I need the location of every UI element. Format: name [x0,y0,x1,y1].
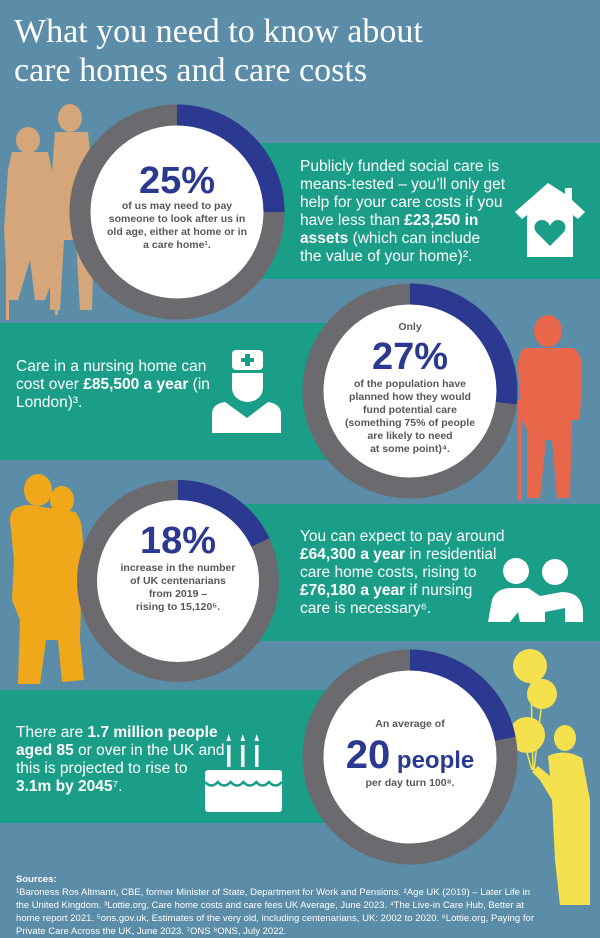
text: nursing home cost: London)³. [16,394,82,411]
sources: ¹Baroness Ros Altmann, CBE, former Minister of State, Department for Work and Pensions. ²Age UK (2019) – Later Life in [16,887,530,898]
ring 2 caption: fund potential care [363,404,457,416]
text: 1.7 million aged 85+: There are 1.7 million people [16,724,218,741]
text: residential costs: You can expect to pay around [300,528,505,545]
text: residential costs: £64,300 a year in residential [300,546,496,563]
illustration: beige couple with walker [4,104,95,320]
text: means-tested: means-tested – you’ll only get [300,176,506,193]
icon: house with heart [515,183,585,257]
stat: 27%: 27% [372,336,448,378]
sources: Private Care Across the UK, June 2023. ⁷ONS ⁸ONS, July 2022. [16,926,286,937]
ring 1 caption [107,200,247,251]
text: means-tested: Publicly funded social care is [300,158,499,175]
ring 2 caption: are likely to need [367,430,453,442]
ring 3 caption: rising to 15,120⁵. [136,601,220,613]
text: residential costs: £76,180 a year if nursing [300,582,472,599]
ring 2 caption: of the population have [354,378,466,390]
ring 3 caption: increase in the number [121,562,235,574]
text: nursing home cost [16,358,210,411]
text: 1.7 million aged 85+: this is projected to rise to [16,760,187,777]
text: residential costs [300,528,505,617]
ring 4 caption: per day turn 100⁸. [366,777,455,789]
text: 1.7 million aged 85+ [16,724,225,795]
sources: the United Kingdom. ³Lottie.org, Care home costs and care fees UK Average, June 2023. ⁴The Live-in Care Hub, Better at [16,900,524,911]
ring 3 caption: of UK centenarians [130,575,226,587]
icon: birthday cake [205,734,282,812]
text: means-tested [300,158,506,265]
band 1 [230,143,600,279]
icon: nurse [212,350,281,433]
ring 3 caption: from 2019 – [149,588,207,600]
text: 1.7 million aged 85+: 3.1m by 2045⁷. [16,778,122,795]
illustration: orange man with cane [518,315,582,500]
sources: Sources: [16,874,57,885]
stat: 18%: 18% [140,520,216,562]
sources [16,874,534,937]
ring 2 caption [345,378,475,455]
sources: home report 2021. ⁵ons.gov.uk, Estimates of the very old, including centenarians, UK: 2002 to 2020. ⁶Lottie.org, Paying for [16,913,534,924]
stat: 20 people: 20 people [346,733,474,777]
ring 3: 18% [87,490,269,672]
stat: 25%: 25% [139,160,215,202]
band 2 [0,323,410,460]
ring 1 caption: someone to look after us in [109,213,245,225]
text: 1.7 million aged 85+: aged 85 or over in the UK and [16,742,225,759]
text: means-tested: have less than £23,250 in [300,212,478,229]
band 4 [0,690,410,823]
text: residential costs: care home costs, rising to [300,564,477,581]
ring 3 caption [121,562,235,613]
icon: two people embracing [488,558,583,622]
title: What you need to know about [14,13,423,50]
ring 2 caption: (something 75% of people [345,417,475,429]
title [14,13,423,89]
text: nursing home cost: Care in a nursing home can [16,358,206,375]
ring 2 caption: planned how they would [349,391,471,403]
ring 4: 20 people [313,660,507,854]
ring 1 caption: of us may need to pay [122,200,232,212]
illustration: golden hugging couple [10,474,84,684]
illustration: yellow woman with balloons [509,649,590,905]
text: nursing home cost: cost over £85,500 a year (in [16,376,210,393]
ring 1 caption: a care home¹. [143,239,211,251]
band 3 [230,504,600,641]
text: means-tested: assets (which can include [300,230,480,247]
ring 2: 27% [313,294,507,488]
text: means-tested: help for your care costs if you [300,194,502,211]
ring 4 pre-label: An average of [375,718,445,730]
text: residential costs: care is necessary⁶. [300,600,431,617]
ring 1: 25% [80,115,274,309]
ring 2 caption: at some point)⁴. [370,443,450,455]
ring 1 caption: old age, either at home or in [107,226,247,238]
title: care homes and care costs [14,52,367,89]
ring 2 pre-label: Only [398,321,422,333]
text: means-tested: the value of your home)². [300,248,472,265]
